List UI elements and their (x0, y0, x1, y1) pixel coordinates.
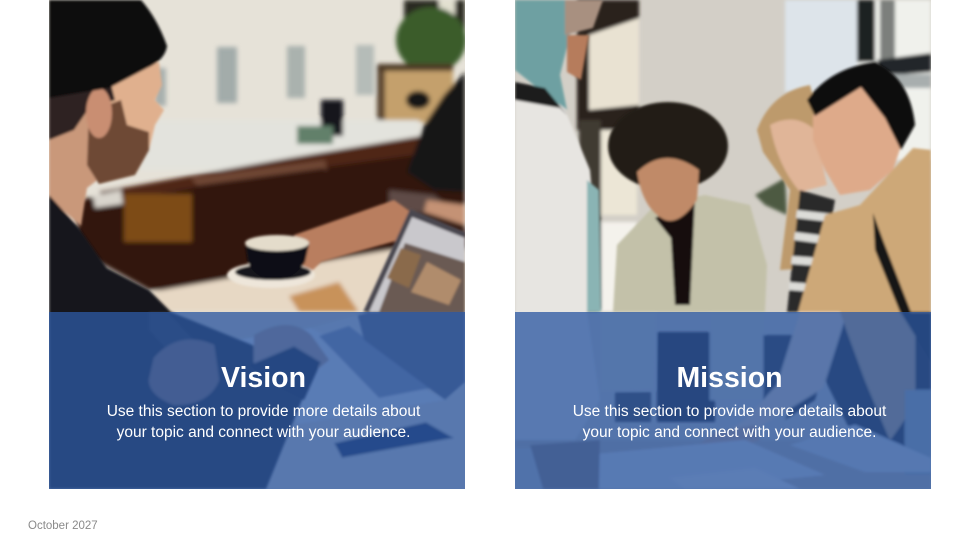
left person (515, 100, 600, 448)
heading: Vision: Vision (221, 362, 306, 394)
heading: Mission: Mission (676, 362, 783, 394)
woman with curly hair (613, 195, 767, 312)
text: vision description (107, 403, 420, 440)
text: mission description: your topic and connect with your audience. (583, 424, 876, 440)
man (49, 110, 104, 226)
lower bodies under overlay (515, 440, 931, 489)
woman in stripes (757, 85, 820, 270)
footer date: October 2027 (28, 520, 98, 532)
text: mission description (573, 403, 886, 440)
photo: team leaning over a table (515, 0, 931, 489)
overlay band (49, 312, 465, 489)
text: vision description: your topic and connect with your audience. (117, 424, 410, 440)
text: vision description: Use this section to provide more details about (107, 403, 420, 420)
panel: mission (515, 0, 931, 489)
photo: man at a cafe table with laptop (49, 0, 465, 489)
text: mission description: Use this section to provide more details about (573, 403, 886, 420)
panel: vision (49, 0, 465, 489)
overlay band (515, 312, 931, 489)
laptop lower half (224, 328, 445, 424)
man in tan shirt (798, 148, 931, 312)
